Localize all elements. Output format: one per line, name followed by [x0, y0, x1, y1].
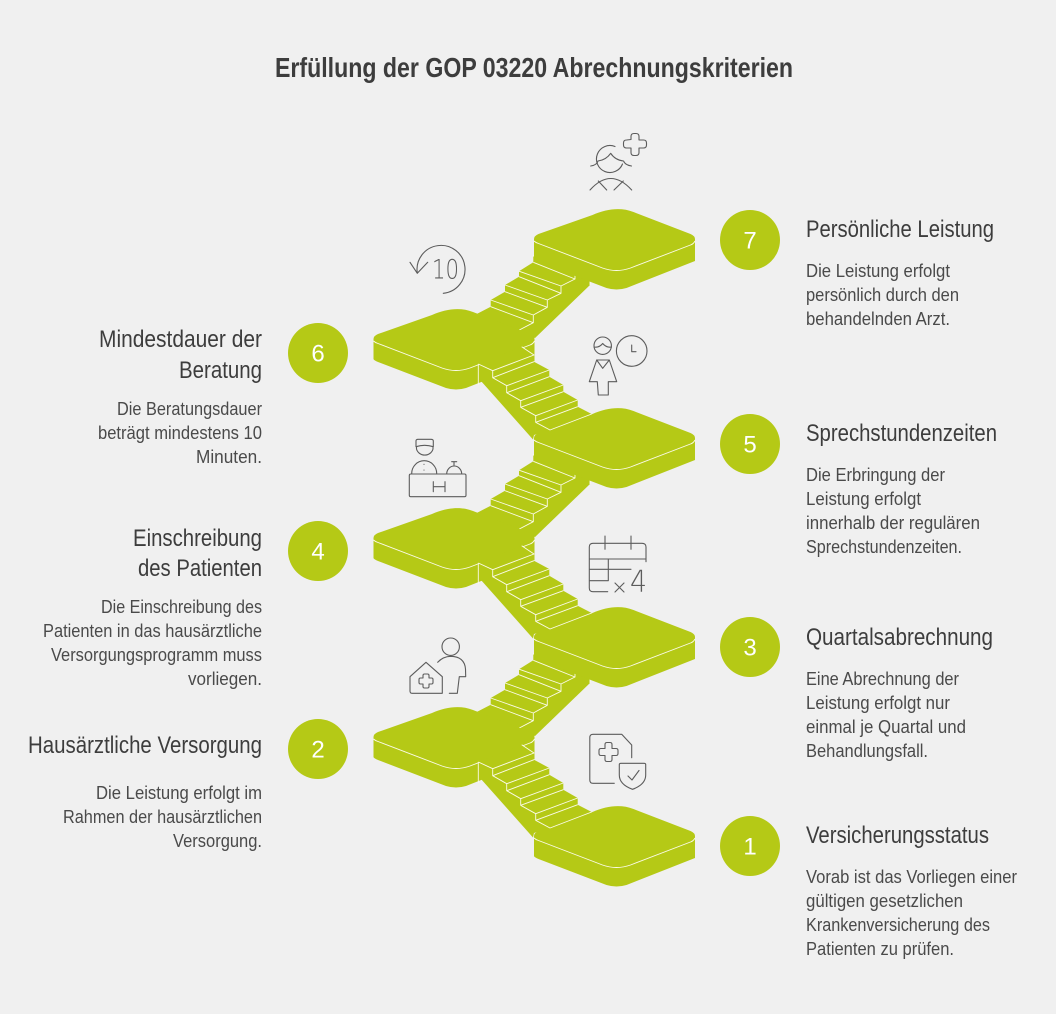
description 3: Eine Abrechnung der [806, 669, 959, 689]
platform 4 [374, 508, 534, 588]
icon: doctor and clock (step 5) [589, 336, 647, 395]
heading 2: Hausärztliche Versorgung [28, 732, 262, 759]
flight: step 4 to 5 [477, 447, 590, 538]
title: Erfüllung der GOP 03220 Abrechnungskriterien [275, 52, 793, 83]
description 3 [806, 669, 966, 761]
number badge 2 [288, 719, 348, 779]
platform 3 [534, 607, 695, 688]
heading 5: Sprechstundenzeiten [806, 420, 997, 447]
description 6: beträgt mindestens 10 [98, 423, 262, 443]
icon: ten minute countdown (step 6): 10 [432, 254, 459, 286]
number badge 4: 4 [311, 538, 325, 566]
icon: ten minute countdown (step 6) [410, 245, 465, 293]
heading 1: Versicherungsstatus [806, 822, 989, 849]
description 5: innerhalb der regulären [806, 513, 980, 533]
description 3: Leistung erfolgt nur [806, 693, 950, 713]
panel: step 6 Mindestdauer der Beratung [98, 323, 348, 467]
description 3: Behandlungsfall. [806, 741, 928, 761]
description 5 [806, 465, 980, 557]
description 7: Die Leistung erfolgt [806, 261, 950, 281]
number badge 7: 7 [743, 228, 757, 254]
flight: step 2 to 3 [477, 646, 590, 737]
number badge 6: 6 [311, 340, 325, 368]
description 3: einmal je Quartal und [806, 717, 966, 737]
icon: nurse with medical cross (step 7) [590, 134, 646, 190]
flight: step 2 to 1 [478, 745, 592, 838]
panel: step 7 Persönliche Leistung [720, 210, 994, 329]
heading 6 [99, 326, 262, 384]
number badge 6 [288, 323, 348, 383]
number badge 4 [288, 521, 348, 581]
number badge 1: 1 [743, 834, 757, 860]
platform 5 [534, 408, 695, 488]
heading 4: des Patienten [138, 555, 262, 582]
description 2: Rahmen der hausärztlichen [63, 807, 262, 827]
icon: patient and practice house (step 2) [410, 638, 466, 693]
icon: calendar times four (step 3): 4 [630, 565, 647, 600]
platform 1 [534, 806, 695, 886]
description 5: Sprechstundenzeiten. [806, 537, 962, 557]
description 4: Patienten in das hausärztliche [43, 621, 262, 641]
number badge 5: 5 [743, 432, 757, 458]
flight: step 6 to 5 [478, 347, 592, 440]
icon: receptionist at desk (step 4) [409, 439, 466, 497]
description 7: persönlich durch den [806, 285, 959, 305]
description 1: Krankenversicherung des [806, 915, 990, 935]
flight: step 6 to 7 [477, 248, 590, 339]
number badge 2: 2 [311, 736, 325, 764]
description 6: Minuten. [196, 447, 262, 467]
description 1 [806, 867, 1017, 959]
description 2: Die Leistung erfolgt im [96, 783, 262, 803]
platform 2 [374, 707, 534, 788]
description 6: Die Beratungsdauer [117, 399, 262, 419]
icon: insurance document with shield (step 1) [590, 734, 646, 789]
panel: step 4 Einschreibung des Patienten [43, 521, 348, 689]
panel: step 2 Hausärztliche Versorgung [28, 719, 348, 851]
number badge 1 [720, 816, 780, 876]
panel: step 3 Quartalsabrechnung [720, 617, 993, 761]
number badge 3 [720, 617, 780, 677]
description 2 [63, 783, 262, 851]
description 6 [98, 399, 262, 467]
heading 4 [133, 525, 262, 582]
platform 6 [374, 309, 534, 390]
description 5: Die Erbringung der [806, 465, 945, 485]
flight: step 4 to 3 [478, 546, 592, 638]
panel: step 5 Sprechstundenzeiten [720, 414, 997, 557]
heading 6: Beratung [179, 357, 262, 384]
icon: calendar times four (step 3) [589, 536, 647, 600]
description 5: Leistung erfolgt [806, 489, 921, 509]
number badge 5 [720, 414, 780, 474]
number badge 7 [720, 210, 780, 270]
platform 7 [534, 209, 695, 290]
description 1: gültigen gesetzlichen [806, 891, 963, 911]
description 2: Versorgung. [173, 831, 262, 851]
heading 7: Persönliche Leistung [806, 216, 994, 243]
heading 6: Mindestdauer der [99, 326, 262, 353]
panel: step 1 Versicherungsstatus [720, 816, 1017, 959]
description 7 [806, 261, 959, 329]
staircase [374, 209, 695, 886]
number badge 3: 3 [743, 634, 757, 662]
description 4: vorliegen. [188, 669, 262, 689]
description 7: behandelnden Arzt. [806, 309, 950, 329]
description 4: Die Einschreibung des [101, 597, 262, 617]
description 1: Patienten zu prüfen. [806, 939, 954, 959]
description 4: Versorgungsprogramm muss [51, 645, 262, 665]
heading 3: Quartalsabrechnung [806, 624, 993, 651]
description 1: Vorab ist das Vorliegen einer [806, 867, 1017, 887]
description 4 [43, 597, 262, 689]
heading 4: Einschreibung [133, 525, 262, 552]
